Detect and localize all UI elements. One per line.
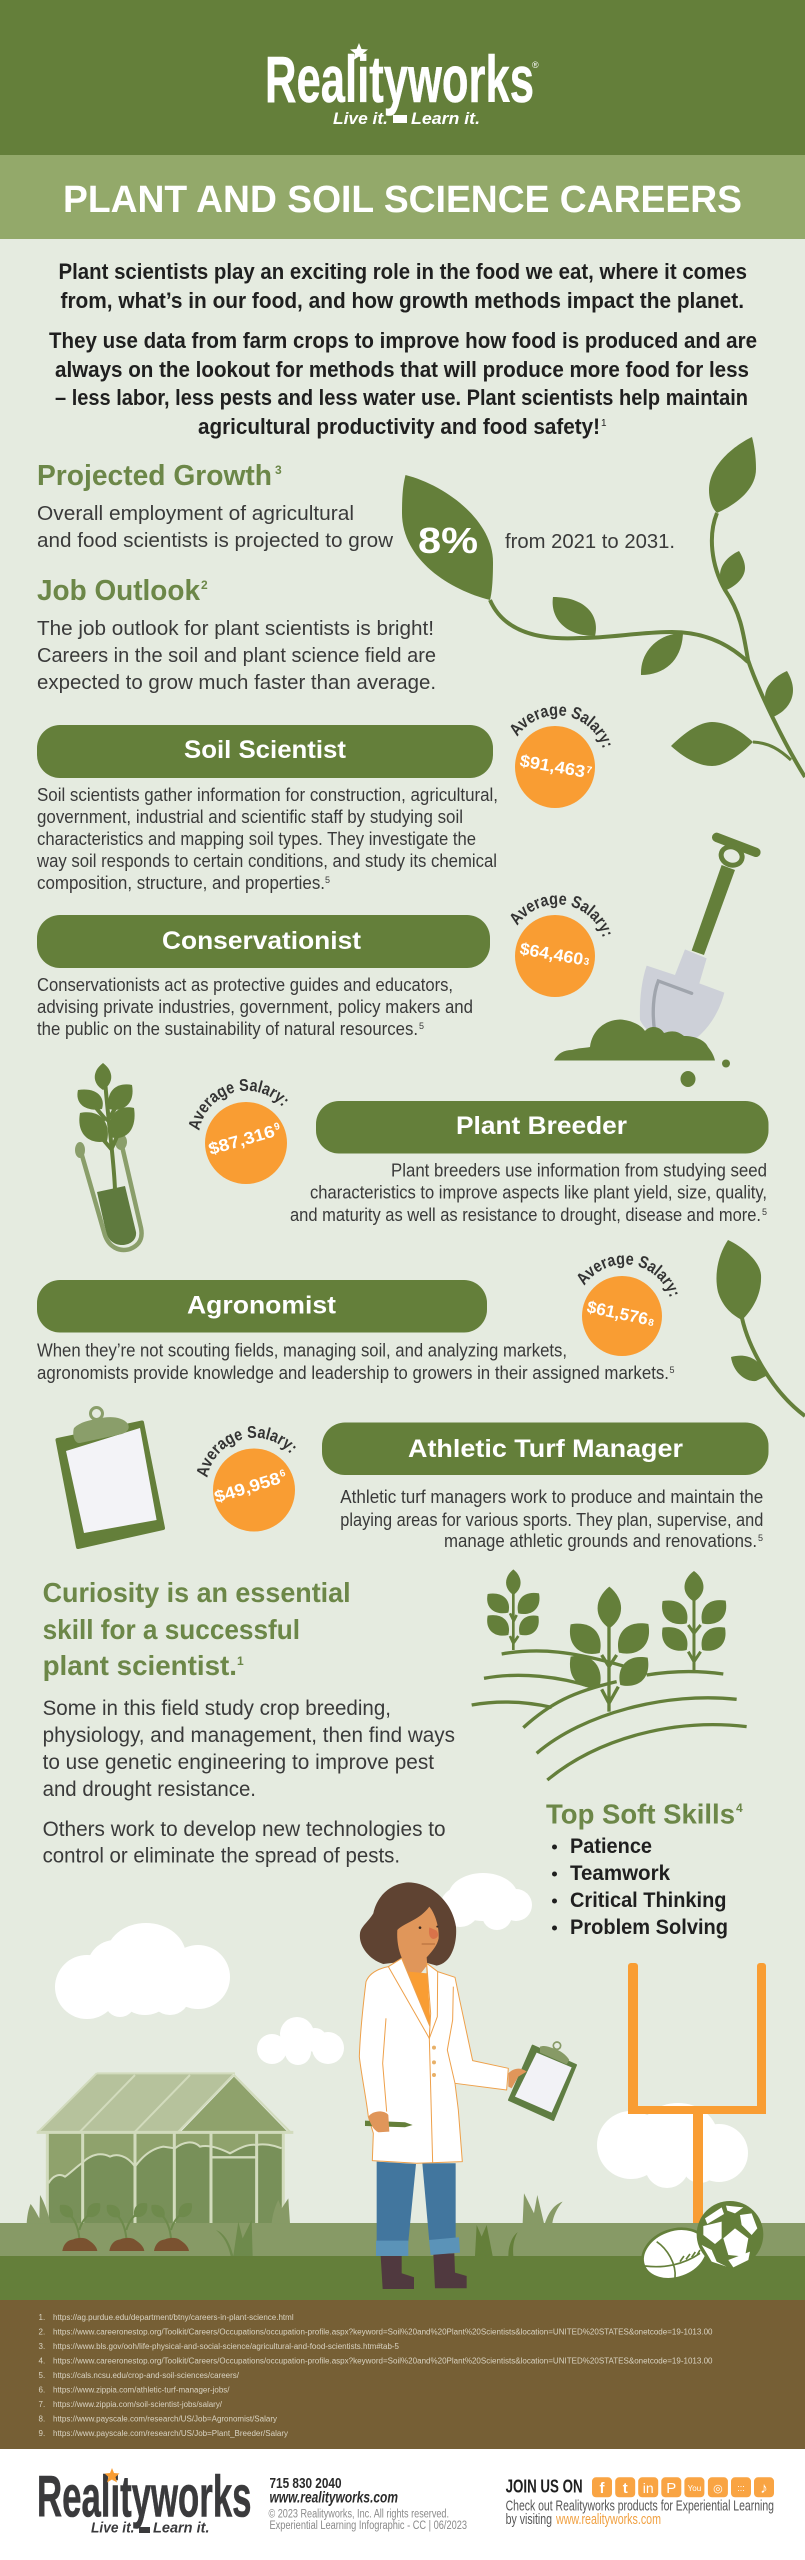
curiosity text block: Others work to develop new technologies to <box>43 1818 446 1841</box>
references panel: https://www.bls.gov/ooh/life-physical-and-social-science/agricultural-and-food-scientists.htm#tab-5 <box>53 2342 400 2351</box>
panel: soil scientist <box>36 725 498 893</box>
top soft skills list: Problem Solving <box>570 1916 728 1939</box>
intro text: – less labor, less pests and less water use. Plant scientists help maintain <box>55 385 748 410</box>
panel: conservationist <box>37 915 490 1039</box>
salary badge: conservationist: $64,460 <box>518 939 585 969</box>
references panel: 6. <box>38 2386 45 2395</box>
salary badge: plant breeder: 9 <box>273 1121 282 1133</box>
panel: soil scientist: way soil responds to certain conditions, and study its chemical <box>36 851 497 871</box>
salary badge: soil scientist: 7 <box>585 765 593 777</box>
panel: athletic turf manager: 5 <box>758 1533 763 1543</box>
contact details: Experiential Learning Infographic - CC | 06/2023 <box>270 2520 467 2532</box>
panel: soil scientist: government, industrial and scientific staff by studying soil <box>37 807 463 827</box>
references panel: 2. <box>38 2328 45 2337</box>
top soft skills list: 4 <box>736 1801 743 1815</box>
salary badge: soil scientist <box>510 706 611 808</box>
panel: plant breeder: Plant breeders use information from studying seed <box>391 1160 767 1180</box>
salary badge: soil scientist: $91,463 <box>518 751 587 781</box>
curiosity text block: and drought resistance. <box>43 1778 256 1801</box>
panel: athletic turf manager: playing areas for various sports. They plan, supervise, and <box>340 1510 763 1530</box>
references panel: https://ag.purdue.edu/department/btny/careers-in-plant-science.html <box>53 2313 294 2322</box>
job outlook block: The job outlook for plant scientists is bright! <box>37 617 434 640</box>
curiosity text block: Some in this field study crop breeding, <box>43 1697 391 1720</box>
panel: conservationist: the public on the sustainability of natural resources. <box>37 1019 418 1039</box>
social links: ♪ <box>760 2480 768 2497</box>
salary badge: conservationist: 3 <box>583 956 590 968</box>
salary badge: agronomist: Average Salary: <box>578 1255 678 1297</box>
projected growth block <box>37 460 675 600</box>
footer logo: Live it. <box>91 2520 134 2537</box>
social links: t <box>623 2480 628 2497</box>
leaf with 8 percent: 8% <box>418 520 478 561</box>
job outlook block: 2 <box>201 578 208 592</box>
panel: soil scientist: composition, structure, and properties. <box>37 873 325 893</box>
salary badge: agronomist: 8 <box>647 1317 655 1329</box>
social links: JOIN US ON <box>506 2476 583 2496</box>
footer logo: Learn it. <box>153 2520 210 2537</box>
curiosity text block: control or eliminate the spread of pests. <box>43 1845 400 1868</box>
icon: shovel in soil <box>554 837 756 1087</box>
references panel: https://www.careeronestop.org/Toolkit/Careers/Occupations/occupation-profile.aspx?keyword=Soil%20and%20Plant%20Scientists&location=UNITED%20STATES&onetcode=19-1013.00 <box>53 2328 713 2337</box>
vine illustration <box>490 437 805 777</box>
references panel: https://www.zippia.com/soil-scientist-jobs/salary/ <box>53 2400 223 2409</box>
contact details: © 2023 Realityworks, Inc. All rights reserved. <box>268 2509 449 2521</box>
plant scientist figure with clipboard <box>359 1882 576 2289</box>
footer <box>0 2449 805 2560</box>
panel: conservationist: Conservationist <box>162 927 362 955</box>
top soft skills list: Top Soft Skills <box>546 1798 735 1830</box>
panel: soil scientist: Soil Scientist <box>184 736 347 764</box>
panel: athletic turf manager: Athletic turf managers work to produce and maintain the <box>340 1487 763 1507</box>
contact details: www.realityworks.com <box>270 2490 398 2507</box>
leaf with 8 percent <box>402 475 493 600</box>
call to action <box>506 2498 774 2528</box>
panel: athletic turf manager: manage athletic grounds and renovations. <box>444 1531 757 1551</box>
references panel: https://www.payscale.com/research/US/Job=Agronomist/Salary <box>53 2415 277 2424</box>
projected growth block: Projected Growth <box>37 460 272 492</box>
salary badge: athletic turf manager: $49,958 <box>212 1469 283 1507</box>
header band with logo <box>0 0 805 155</box>
salary badge: soil scientist: Average Salary: <box>510 706 611 748</box>
lower vine illustration <box>716 1240 805 1416</box>
references panel: 8. <box>38 2415 45 2424</box>
title band <box>0 155 805 239</box>
header band with logo: Learn it. <box>411 109 480 128</box>
salary badge: plant breeder <box>188 1079 288 1184</box>
header band with logo: Realityworks <box>265 42 534 116</box>
salary badge: conservationist: Average Salary: <box>510 895 611 937</box>
top soft skills list: Teamwork <box>570 1862 670 1885</box>
icon: crop rows <box>472 1569 747 1780</box>
projected growth block: from 2021 to 2031. <box>505 530 675 553</box>
top soft skills list: Critical Thinking <box>570 1889 726 1912</box>
curiosity text block <box>43 1577 455 1868</box>
projected growth block: Overall employment of agricultural <box>37 502 354 525</box>
panel: agronomist: 5 <box>670 1365 675 1375</box>
call to action: by visiting <box>506 2511 552 2528</box>
curiosity text block: to use genetic engineering to improve pest <box>43 1751 434 1774</box>
projected growth block: and food scientists is projected to grow <box>37 529 393 552</box>
curiosity text block: physiology, and management, then find ways <box>43 1724 455 1747</box>
salary badge: plant breeder: Average Salary: <box>188 1079 288 1130</box>
curiosity text block: plant scientist. <box>43 1650 237 1681</box>
panel: agronomist: agronomists provide knowledge and leadership to growers in their assigned markets. <box>37 1363 669 1383</box>
social links: f <box>600 2480 606 2497</box>
intro text: agricultural productivity and food safety! <box>198 414 600 439</box>
salary badge: conservationist <box>510 895 611 997</box>
salary badge: agronomist <box>578 1255 678 1356</box>
job outlook block: expected to grow much faster than average. <box>37 671 436 694</box>
panel: agronomist <box>37 1280 675 1383</box>
panel: agronomist: Agronomist <box>187 1291 337 1319</box>
panel: soil scientist: characteristics and mapping soil types. They investigate the <box>37 829 476 849</box>
references panel: 7. <box>38 2400 45 2409</box>
references panel: https://www.careeronestop.org/Toolkit/Careers/Occupations/occupation-profile.aspx?keyword=Soil%20and%20Plant%20Scientists&location=UNITED%20STATES&onetcode=19-1013.00 <box>53 2357 713 2366</box>
job outlook block: Careers in the soil and plant science field are <box>37 644 436 667</box>
intro text: 1 <box>601 418 607 429</box>
social links: P <box>666 2480 676 2497</box>
footer logo <box>37 2465 252 2537</box>
intro text: always on the lookout for methods that will produce more food for less <box>55 357 749 382</box>
title band: PLANT AND SOIL SCIENCE CAREERS <box>63 179 742 221</box>
references panel: 1. <box>38 2313 45 2322</box>
social links: in <box>643 2480 654 2496</box>
ground bands <box>0 2223 805 2300</box>
intro text: They use data from farm crops to improve how food is produced and are <box>49 328 757 353</box>
seedlings and grass by greenhouse <box>27 2195 290 2256</box>
intro text: from, what’s in our food, and how growth methods impact the planet. <box>60 288 744 313</box>
panel: conservationist: advising private industries, government, policy makers and <box>37 997 473 1017</box>
panel: athletic turf manager: Athletic Turf Manager <box>408 1435 683 1463</box>
call to action: www.realityworks.com <box>555 2511 661 2528</box>
references panel <box>0 2300 805 2449</box>
intro text <box>49 259 757 439</box>
intro text: Plant scientists play an exciting role in the food we eat, where it comes <box>58 259 747 284</box>
contact details: 715 830 2040 <box>270 2475 342 2492</box>
icon: football and soccer ball <box>635 2201 763 2288</box>
curiosity text block: skill for a successful <box>43 1614 300 1645</box>
references panel: https://www.payscale.com/research/US/Job=Plant_Breeder/Salary <box>53 2429 288 2438</box>
salary badge: athletic turf manager: Average Salary: <box>196 1426 296 1478</box>
panel: plant breeder: Plant Breeder <box>456 1112 627 1140</box>
goal post <box>628 1963 766 2224</box>
social links: ◎ <box>713 2483 723 2495</box>
panel: soil scientist: 5 <box>325 875 330 885</box>
salary badge: agronomist: $61,576 <box>585 1297 650 1329</box>
header band with logo: Live it. <box>333 109 388 128</box>
panel: athletic turf manager <box>322 1422 768 1551</box>
job outlook block <box>37 575 436 694</box>
footer logo: Realityworks <box>37 2465 252 2530</box>
panel: agronomist: When they’re not scouting fields, managing soil, and analyzing markets, <box>37 1341 567 1361</box>
salary badge: athletic turf manager <box>196 1426 296 1532</box>
references panel: 3. <box>38 2342 45 2351</box>
panel: plant breeder <box>290 1101 768 1225</box>
panel: plant breeder: 5 <box>762 1207 767 1217</box>
panel: plant breeder: and maturity as well as resistance to drought, disease and more. <box>290 1205 761 1225</box>
top soft skills list <box>546 1798 743 1939</box>
social links <box>506 2476 774 2497</box>
clouds <box>55 1873 748 2188</box>
greenhouse <box>37 2073 293 2223</box>
references panel: 9. <box>38 2429 45 2438</box>
top soft skills list: Patience <box>570 1835 652 1858</box>
panel: conservationist: Conservationists act as protective guides and educators, <box>37 975 453 995</box>
projected growth block: 3 <box>275 463 282 477</box>
panel: conservationist: 5 <box>419 1021 424 1031</box>
panel: soil scientist: Soil scientists gather information for construction, agricultural, <box>37 785 498 805</box>
social links: ::: <box>737 2483 745 2493</box>
curiosity text block: Curiosity is an essential <box>43 1577 351 1608</box>
icon: clipboard <box>58 1408 163 1547</box>
panel: plant breeder: characteristics to improve aspects like plant yield, size, quality, <box>310 1183 767 1203</box>
header band with logo: ® <box>532 60 539 70</box>
social links: You <box>688 2484 701 2493</box>
references panel: https://cals.ncsu.edu/crop-and-soil-sciences/careers/ <box>53 2371 240 2380</box>
references panel: https://www.zippia.com/athletic-turf-manager-jobs/ <box>53 2386 230 2395</box>
salary badge: plant breeder: $87,316 <box>206 1122 277 1159</box>
contact details <box>268 2475 467 2532</box>
references panel: 4. <box>38 2357 45 2366</box>
references panel: 5. <box>38 2371 45 2380</box>
curiosity text block: 1 <box>237 1654 244 1668</box>
job outlook block: Job Outlook <box>37 575 201 607</box>
icon: test tube with seedling <box>75 1063 142 1250</box>
salary badge: athletic turf manager: 6 <box>278 1468 287 1480</box>
